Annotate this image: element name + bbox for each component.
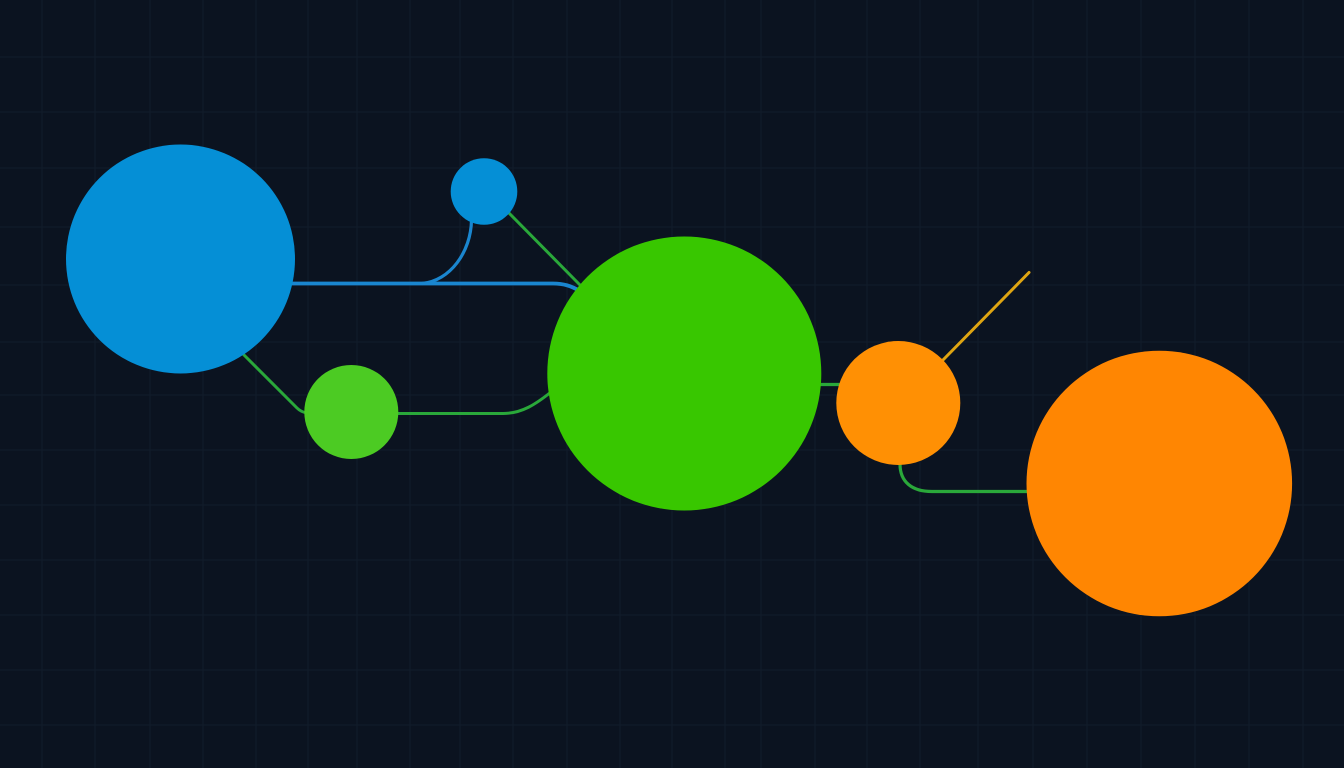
circle: light green — [304, 365, 398, 459]
connector: green line from large green circle to orange circle — [819, 383, 840, 386]
connector: green line from large blue circle to light green circle — [243, 354, 307, 413]
connector: blue main line — [288, 284, 580, 291]
connector: green line from small blue circle to large green circle — [508, 212, 581, 286]
circle: large blue — [66, 144, 295, 374]
connector: blue branch from small circle — [422, 220, 472, 284]
circle: medium orange — [836, 341, 960, 465]
connector: green line from light green circle to large green circle — [396, 392, 551, 414]
connector: green line from orange circle to large orange circle — [900, 464, 1030, 492]
connector: yellow line from orange circle — [942, 272, 1029, 361]
circle: small blue — [451, 158, 517, 225]
circle: large orange — [1026, 351, 1292, 616]
circle: large green — [547, 236, 821, 510]
